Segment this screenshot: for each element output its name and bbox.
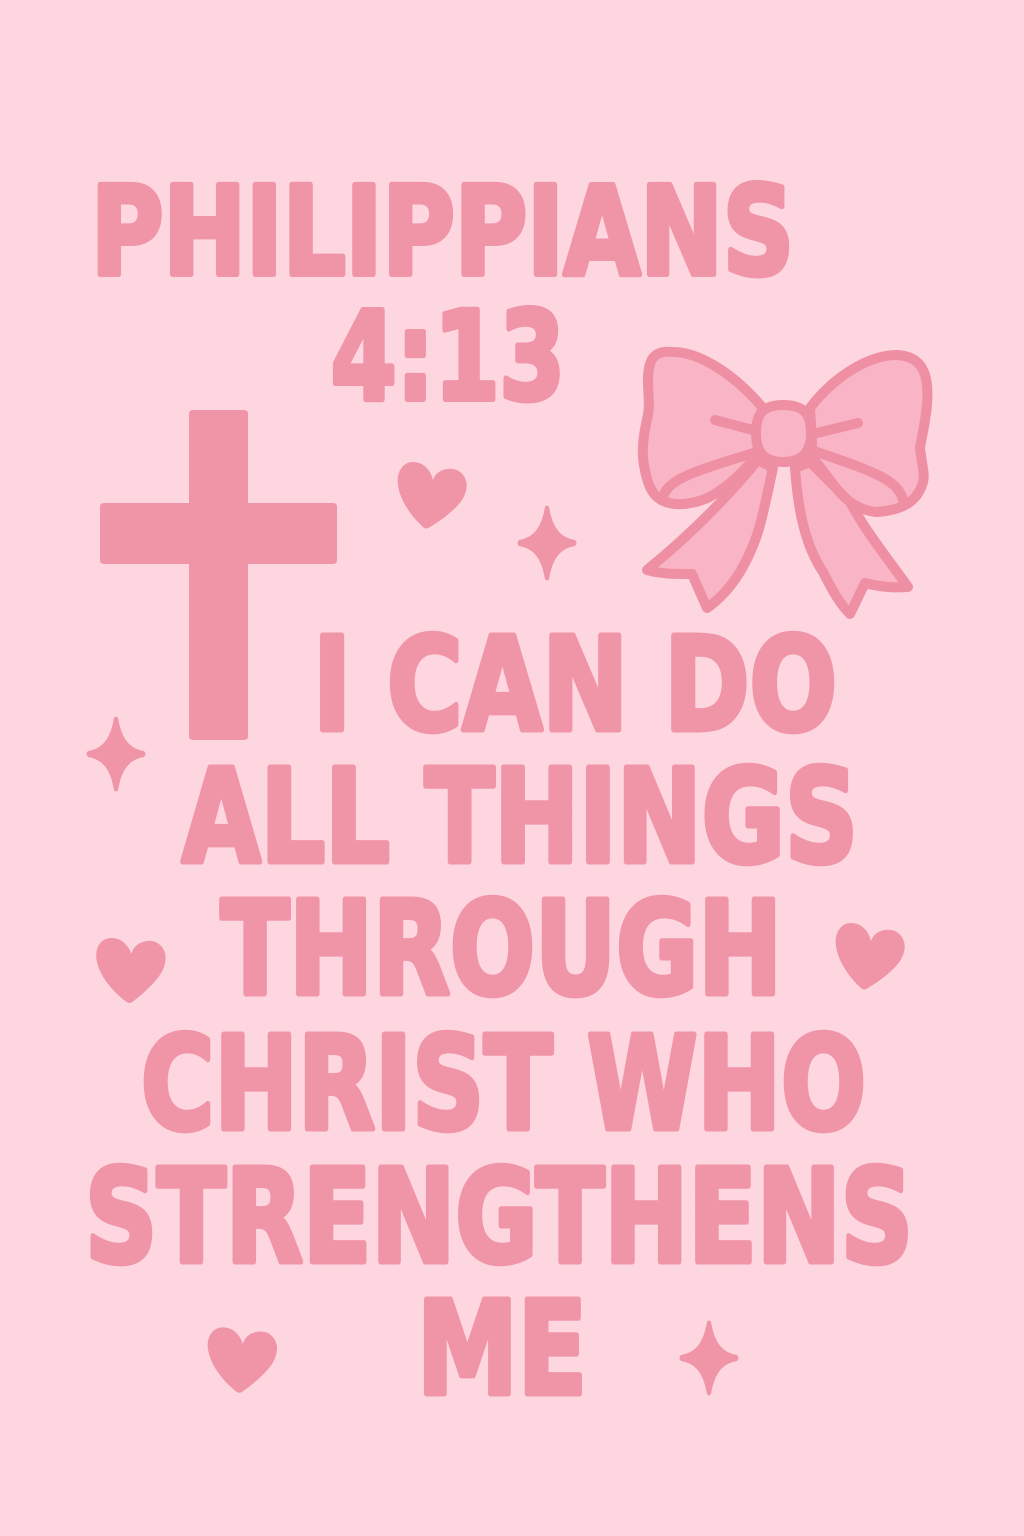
icon: heart bottom left bbox=[206, 1324, 280, 1395]
main verse text: I CAN DO bbox=[313, 610, 837, 760]
bow left loop bbox=[643, 352, 762, 504]
main verse text: ALL THINGS bbox=[182, 742, 858, 892]
heading: Philippians 4:13 bbox=[91, 161, 794, 428]
main verse text bbox=[85, 610, 913, 1424]
main verse text: THROUGH bbox=[221, 874, 782, 1024]
bow right fold line bbox=[817, 423, 858, 433]
icon: cross bbox=[100, 410, 337, 740]
heading: Philippians 4:13: PHILIPPIANS bbox=[91, 161, 794, 303]
bow right tail bbox=[795, 462, 908, 614]
icon: sparkle left bbox=[86, 716, 146, 792]
bow left tail bbox=[647, 460, 773, 608]
icon: heart right bbox=[836, 923, 905, 990]
icon: sparkle near bow bbox=[518, 506, 576, 580]
icon: bow bbox=[643, 352, 927, 614]
bow right loop bbox=[810, 355, 927, 512]
bow left crease bbox=[663, 452, 757, 497]
icon: heart near cross bbox=[398, 462, 467, 528]
bow knot bbox=[756, 405, 811, 462]
bow left fold line bbox=[715, 420, 753, 430]
bow right crease bbox=[817, 452, 903, 500]
icon: sparkle bottom right bbox=[680, 1320, 738, 1396]
icon: heart left bbox=[94, 933, 170, 1006]
heading: Philippians 4:13: 4:13 bbox=[331, 286, 565, 428]
main verse text: ME bbox=[417, 1274, 587, 1424]
